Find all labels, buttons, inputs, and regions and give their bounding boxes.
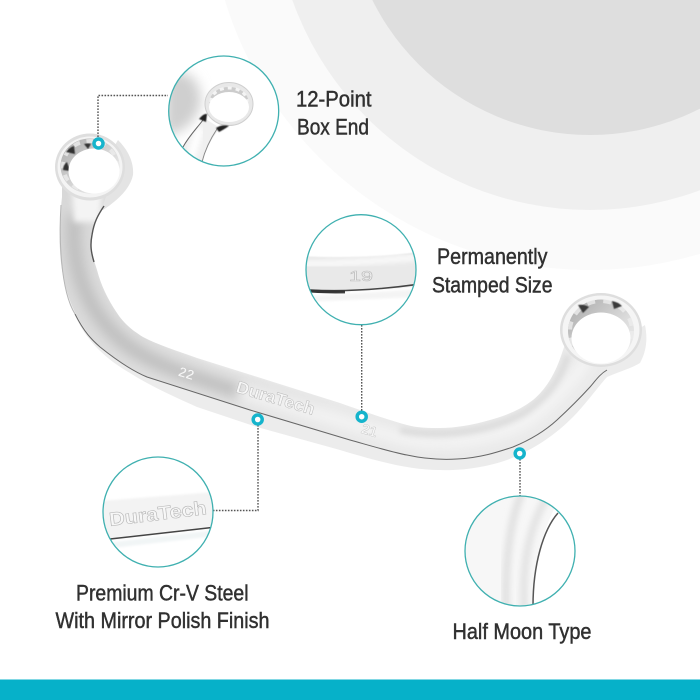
stamp: DuraTech: DuraTech — [108, 498, 208, 531]
label: Permanently Stamped Size — [432, 244, 552, 298]
zoom circle: half moon — [460, 490, 575, 610]
zoom circle: steel finish — [100, 457, 216, 567]
marker dot: half moon — [515, 449, 524, 458]
dark lower edge line — [75, 314, 607, 459]
marker dot: steel — [253, 415, 262, 424]
label: Half Moon Type: Half Moon Type — [452, 619, 592, 644]
zoom circle: 12-point box end — [165, 56, 279, 172]
bottom teal bar — [0, 680, 700, 700]
zoom circle: stamped size — [300, 215, 420, 325]
body reflections — [72, 190, 588, 443]
wrench stamp: 22: 22 — [177, 363, 196, 383]
marker dot: box end — [94, 139, 103, 148]
label: Permanently Stamped Size: Stamped Size — [432, 272, 552, 298]
callout line: steel — [213, 419, 258, 510]
wrench — [55, 134, 646, 470]
label: 12-Point Box End: Box End — [297, 114, 369, 140]
left head side bevel — [85, 140, 133, 210]
label: 12-Point Box End — [296, 86, 372, 140]
label: Premium Cr-V Steel With Mirror Polish Finish — [56, 580, 270, 633]
label: 12-Point Box End: 12-Point — [296, 86, 372, 112]
background concentric circles — [208, 0, 700, 270]
wrench stamp: DuraTech: DuraTech — [234, 378, 317, 419]
wrench lower bevel — [60, 250, 646, 470]
left box end — [55, 134, 125, 200]
stamp: 19: 19 — [349, 268, 373, 285]
marker dot: stamped size — [357, 412, 366, 421]
callout line: stamped size — [361, 325, 363, 417]
wrench stamp: 21: 21 — [360, 420, 379, 440]
wrench polished body — [60, 180, 620, 459]
right box end — [560, 293, 642, 367]
callout line: box end — [98, 96, 168, 143]
callout line: half moon — [519, 453, 521, 496]
left outer edge line — [60, 205, 75, 314]
label: Permanently Stamped Size: Permanently — [437, 244, 548, 269]
dark inner edge — [91, 206, 104, 262]
label: Premium Cr-V Steel With Mirror Polish Finish: With Mirror Polish Finish — [56, 608, 270, 633]
label: Premium Cr-V Steel With Mirror Polish Finish: Premium Cr-V Steel — [76, 580, 248, 606]
